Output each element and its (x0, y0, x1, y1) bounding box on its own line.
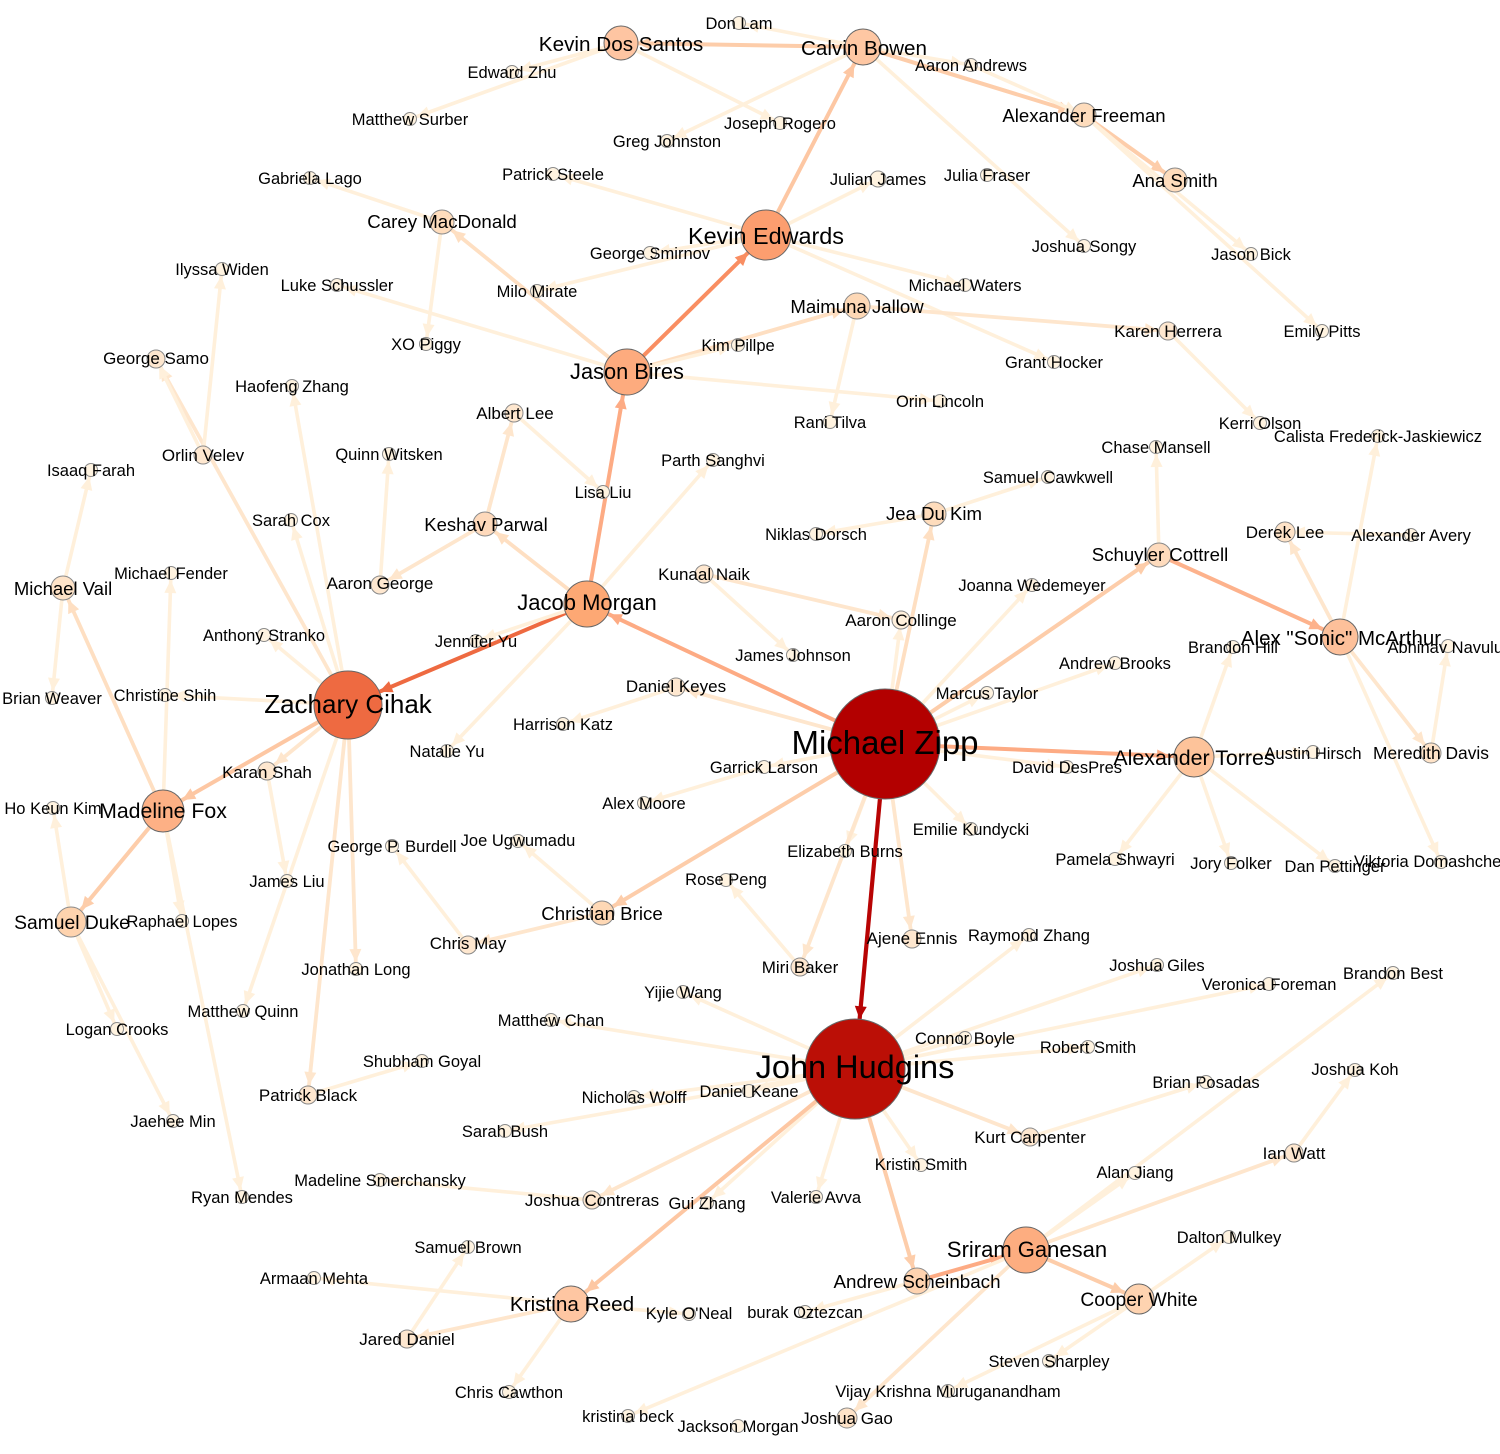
small nodes: top region: Julian James (830, 171, 926, 189)
small nodes: middle region: Brandon Hill (1188, 639, 1278, 657)
node: Meredith Davis: Meredith Davis (1373, 743, 1489, 763)
node: Samuel Duke: Samuel Duke (14, 913, 130, 934)
small nodes: top region: Gabriela Lago (258, 170, 362, 188)
small nodes: top region: Greg Johnston (613, 133, 721, 151)
small nodes: bottom region: Raymond Zhang (968, 927, 1090, 945)
small nodes: bottom region: Nicholas Wolff (582, 1089, 687, 1107)
node: Kristina Reed: Kristina Reed (510, 1293, 634, 1316)
node: Orlin Velev: Orlin Velev (162, 446, 245, 465)
node: Derek Lee: Derek Lee (1246, 523, 1324, 542)
small nodes: middle region: Emilie Kundycki (913, 821, 1029, 839)
small nodes: bottom region: Steven Sharpley (988, 1353, 1110, 1371)
arrows from Kurt Carpenter, Sriram Ganesan, Cooper White, Ian Watt (628, 973, 1393, 1418)
node: Zachary Cihak: Zachary Cihak (264, 689, 433, 719)
small nodes: middle region: Joe Ugwumadu (461, 832, 575, 850)
small nodes: top region: Kerri Olson (1219, 415, 1301, 433)
node: Cooper White: Cooper White (1080, 1290, 1198, 1311)
node: Ajene Ennis: Ajene Ennis (867, 929, 957, 948)
small nodes: bottom region: Armaan Mehta (260, 1270, 369, 1288)
node: Carey MacDonald: Carey MacDonald (367, 211, 517, 232)
node: Jea Du Kim: Jea Du Kim (886, 503, 982, 524)
small nodes: bottom region (66, 927, 1443, 1436)
small nodes: top region: George Smirnov (590, 245, 711, 263)
small nodes: middle region: Alex Moore (602, 795, 686, 813)
small nodes: middle region: Elizabeth Burns (787, 843, 903, 861)
node: Aaron George: Aaron George (327, 574, 433, 593)
node: Patrick Black: Patrick Black (259, 1086, 358, 1105)
small nodes: bottom region: Yijie Wang (644, 984, 722, 1002)
small nodes: top region: Rani Tilva (794, 414, 867, 432)
small nodes: top region: Edward Zhu (468, 64, 556, 82)
small nodes: bottom region: Daniel Keane (699, 1083, 799, 1101)
arrows from Michael Zipp (587, 514, 1194, 1069)
small nodes: top region: Michael Waters (908, 277, 1022, 295)
small nodes: top region: Luke Schussler (281, 277, 394, 295)
small nodes: bottom region: Kristin Smith (875, 1156, 967, 1174)
small nodes: bottom region: Gui Zhang (668, 1195, 746, 1213)
arrows from Zachary Cihak, Madeline Fox, Samuel Duke (52, 269, 422, 1197)
small nodes: top region (47, 15, 1482, 502)
small nodes: bottom region: Ryan Mendes (191, 1189, 293, 1207)
arrows from Christian Brice, Chris May, Miri Baker (392, 841, 800, 967)
node: Christian Brice: Christian Brice (541, 903, 663, 924)
node: Daniel Keyes: Daniel Keyes (626, 677, 726, 696)
node: Jason Bires: Jason Bires (570, 359, 684, 384)
small nodes: middle region: Natalie Yu (410, 743, 484, 761)
small nodes: bottom region: Logan Crooks (66, 1021, 168, 1039)
node: Kevin Edwards: Kevin Edwards (688, 223, 844, 249)
node: Albert Lee: Albert Lee (476, 404, 554, 423)
node: Jacob Morgan: Jacob Morgan (517, 590, 657, 615)
small nodes: bottom region: Brandon Best (1343, 965, 1443, 983)
node: Sriram Ganesan (947, 1227, 1107, 1273)
node: Keshav Parwal: Keshav Parwal (424, 514, 548, 535)
small nodes: middle region: Ho Keun Kim (4, 800, 102, 818)
small nodes: middle region: Niklas Dorsch (765, 526, 867, 544)
small nodes: top region: Don Lam (706, 15, 772, 33)
arrows from Jason Bires, Kevin Edwards, Maimuna Jallow, Carey MacDonald (310, 47, 1260, 423)
small nodes: middle region: George P. Burdell (327, 838, 457, 856)
small nodes: top region: Chase Mansell (1101, 439, 1211, 457)
node: Michael Zipp: Michael Zipp (791, 724, 979, 761)
small nodes: top region: Quinn Witsken (335, 446, 443, 464)
node: John Hudgins: John Hudgins (756, 1049, 954, 1085)
small nodes: top region: Matthew Surber (352, 111, 469, 129)
node: Kurt Carpenter: Kurt Carpenter (974, 1128, 1086, 1147)
node: Ana Smith: Ana Smith (1132, 170, 1218, 191)
small nodes: middle region: Raphael Lopes (126, 913, 238, 931)
small nodes: bottom region: Kyle O'Neal (646, 1305, 732, 1323)
node: Michael Vail: Michael Vail (14, 578, 112, 599)
node: Maimuna Jallow: Maimuna Jallow (790, 296, 924, 317)
small nodes: top region: Calista Frederick-Jaskiewicz (1274, 428, 1482, 446)
small nodes: middle region: Austin Hirsch (1264, 745, 1362, 763)
small nodes: middle region: Rose Peng (685, 871, 767, 889)
small nodes: middle region: Garrick Larson (710, 759, 818, 777)
node: Alex "Sonic" McArthur (1241, 619, 1441, 655)
small nodes: bottom region: Dalton Mulkey (1177, 1229, 1282, 1247)
node: Michael Zipp (791, 689, 979, 799)
small nodes: middle region: James Johnson (735, 647, 851, 665)
small nodes: middle region: Alexander Avery (1351, 527, 1472, 545)
small nodes: top region: XO Piggy (391, 336, 462, 354)
small nodes: bottom region: Madeline Smerchansky (294, 1172, 466, 1190)
small nodes: top region: Patrick Steele (502, 166, 604, 184)
small nodes: top region: Lisa Liu (575, 484, 631, 502)
small nodes: top region: Parth Sanghvi (661, 452, 765, 470)
small nodes: bottom region: Vijay Krishna Muruganandham (835, 1383, 1061, 1401)
node: Karan Shah: Karan Shah (222, 763, 312, 782)
node: Jared Daniel: Jared Daniel (359, 1330, 455, 1349)
small nodes: bottom region: Joshua Giles (1109, 957, 1205, 975)
small nodes: bottom region: Shubham Goyal (363, 1053, 481, 1071)
small nodes: bottom region: Robert Smith (1040, 1039, 1136, 1057)
small nodes: bottom region: Joshua Koh (1311, 1061, 1399, 1079)
small nodes: middle region: Anthony Stranko (203, 627, 325, 645)
node: Andrew Scheinbach: Andrew Scheinbach (833, 1271, 1001, 1292)
small nodes: middle region: Andrew Brooks (1059, 655, 1171, 673)
small nodes: middle region: Joanna Wedemeyer (958, 577, 1106, 595)
arrows from Calvin Bowen, Kevin Dos Santos, Alexander Freeman, Ana Smith (410, 23, 1322, 331)
node: Schuyler Cottrell: Schuyler Cottrell (1092, 544, 1228, 565)
node: Karen Herrera: Karen Herrera (1114, 322, 1222, 341)
small nodes: top region: Joseph Rogero (724, 115, 836, 133)
small nodes: middle region: Brian Weaver (2, 690, 102, 708)
small nodes: middle region: Jory Folker (1190, 855, 1272, 873)
node: Sriram Ganesan: Sriram Ganesan (947, 1237, 1107, 1262)
small nodes: middle region: Jennifer Yu (435, 633, 517, 651)
arrows from Jacob Morgan, Keshav Parwal (348, 372, 713, 751)
node: Kristina Reed (510, 1286, 634, 1322)
small nodes: top region: Jason Bick (1211, 246, 1292, 264)
small nodes: bottom region: Chris Cawthon (455, 1384, 563, 1402)
node: Aaron Collinge: Aaron Collinge (845, 611, 957, 630)
small nodes: middle region: Dan Pettinger (1285, 858, 1386, 876)
small nodes: top region: Julia Fraser (944, 167, 1031, 185)
node: Kevin Dos Santos: Kevin Dos Santos (539, 33, 703, 56)
small nodes: top region: Orin Lincoln (896, 393, 984, 411)
small nodes: top region: Aaron Andrews (915, 57, 1027, 75)
small nodes: top region: Emily Pitts (1283, 323, 1361, 341)
node: Ian Watt: Ian Watt (1263, 1144, 1326, 1163)
node: Jacob Morgan (517, 581, 657, 627)
node: Calvin Bowen: Calvin Bowen (801, 37, 927, 60)
small nodes: top region: Kim Pillpe (701, 337, 775, 355)
small nodes: bottom region: Jaehee Min (130, 1113, 216, 1131)
node: Kunaal Naik: Kunaal Naik (658, 565, 750, 584)
node: Miri Baker: Miri Baker (762, 958, 839, 977)
small nodes: bottom region: Valerie Avva (771, 1189, 862, 1207)
small nodes: bottom region: Connor Boyle (915, 1030, 1015, 1048)
node: Chris May: Chris May (430, 934, 507, 953)
small nodes: middle region: Pamela Shwayri (1055, 851, 1175, 869)
node: Alexander Freeman: Alexander Freeman (1002, 105, 1166, 126)
small nodes: top region: Joshua Songy (1032, 238, 1137, 256)
node: Calvin Bowen (801, 29, 927, 65)
node: Alexander Torres (1113, 737, 1275, 777)
small nodes: bottom region: Matthew Quinn (188, 1003, 298, 1021)
small nodes: middle region: James Liu (249, 873, 325, 891)
small nodes: middle region: Christine Shih (114, 687, 216, 705)
small nodes: bottom region: Veronica Foreman (1202, 976, 1336, 994)
small nodes: bottom region: kristina beck (582, 1408, 675, 1426)
small nodes: bottom region: Samuel Brown (414, 1239, 522, 1257)
node: Alex "Sonic" McArthur: Alex "Sonic" McArthur (1241, 627, 1441, 650)
node: Alexander Torres: Alexander Torres (1113, 746, 1275, 770)
small nodes: middle region: Marcus Taylor (936, 685, 1039, 703)
small nodes: middle region: David DesPres (1012, 759, 1122, 777)
node: George Samo: George Samo (103, 349, 209, 368)
arrows from Kristina Reed, Jared Daniel, Joshua Contreras (314, 1180, 689, 1392)
small nodes: bottom region: Brian Posadas (1152, 1074, 1260, 1092)
small nodes: top region: Grant Hocker (1005, 354, 1104, 372)
small nodes: bottom region: Matthew Chan (498, 1012, 604, 1030)
small nodes: middle region: Harrison Katz (513, 716, 613, 734)
small nodes: bottom region: burak Oztezcan (747, 1304, 863, 1322)
small nodes: top region: Isaaq Farah (47, 462, 135, 480)
node: Jason Bires (570, 349, 684, 395)
node: Madeline Fox: Madeline Fox (99, 799, 227, 823)
small nodes: middle region: Michael Fender (114, 565, 228, 583)
small nodes: bottom region: Sarah Bush (462, 1123, 548, 1141)
small nodes: middle region: Sarah Cox (252, 512, 331, 530)
small nodes: bottom region: Jackson Morgan (677, 1418, 799, 1436)
arrows from John Hudgins (505, 935, 1269, 1304)
small nodes: top region: Samuel Cawkwell (983, 469, 1113, 487)
small nodes: top region: Ilyssa Widen (175, 261, 269, 279)
node: Joshua Contreras: Joshua Contreras (525, 1191, 659, 1210)
node: Kevin Edwards (688, 210, 844, 260)
node: Madeline Fox (99, 790, 227, 832)
node: John Hudgins (756, 1019, 954, 1119)
node: Joshua Gao: Joshua Gao (801, 1409, 893, 1428)
arrows from mid-right hubs (563, 436, 1448, 866)
node: Kevin Dos Santos (539, 26, 703, 60)
small nodes: top region: Haofeng Zhang (235, 378, 349, 396)
small nodes: bottom region: Alan Jiang (1096, 1164, 1174, 1182)
small nodes: bottom region: Jonathan Long (301, 961, 411, 979)
small nodes: top region: Milo Mirate (497, 283, 577, 301)
small nodes: middle region (2, 512, 1500, 931)
node: Zachary Cihak (264, 671, 433, 739)
